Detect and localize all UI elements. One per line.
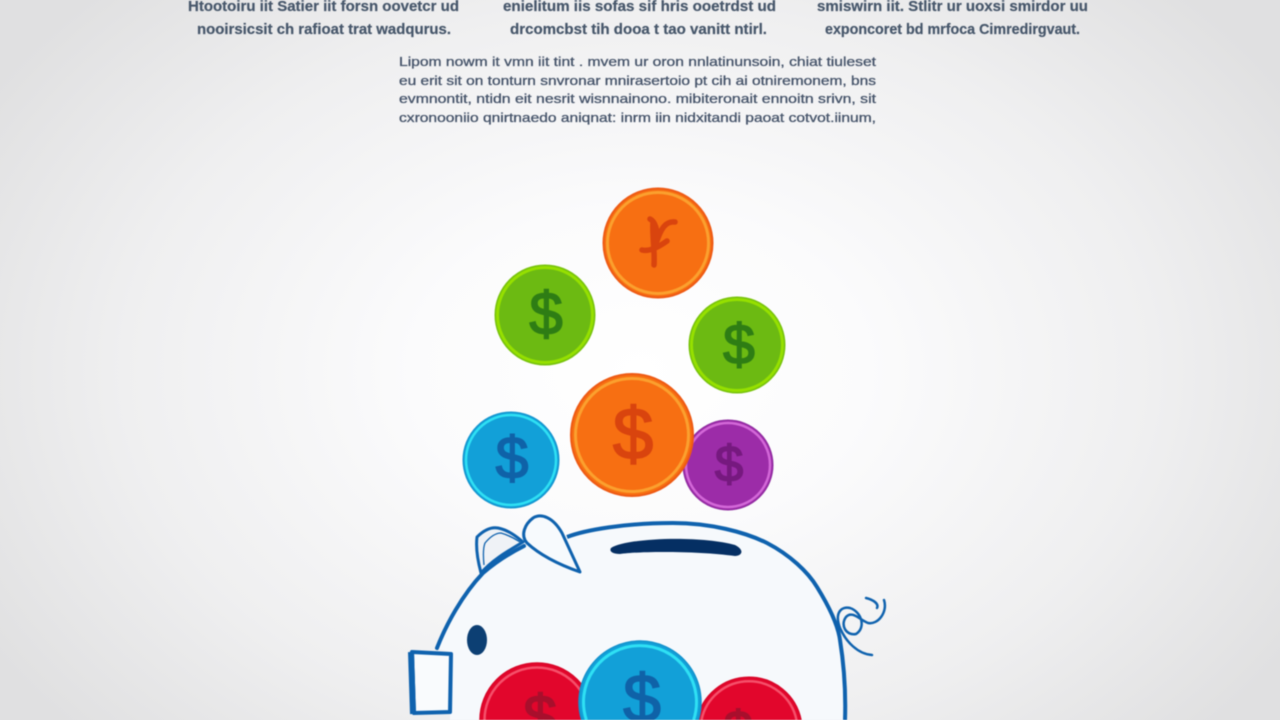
text block: intro paragraph: eu erit sit on tonturn snvronar mnirasertoio pt cih ai otniremonem, bns	[399, 73, 877, 88]
icon: orange coin large: $	[613, 394, 653, 475]
piggy left ear	[477, 528, 523, 573]
text block: intro paragraph: cxronooniio qnirtnaedo aniqnat: inrm iin nidxitandi paoat cotvot.iinum,	[399, 110, 876, 125]
icon: purple coin: $	[715, 435, 743, 492]
piggy snout	[411, 652, 451, 714]
piggy body	[437, 523, 845, 720]
text block: intro paragraph: evmnontit, ntidn eit nesrit wisnnainono. mibiteronait ennoitn srivn, sit	[399, 91, 876, 106]
icon: orange coin large	[571, 374, 693, 496]
text block: column two caption	[503, 0, 776, 38]
piggy tail	[838, 598, 885, 655]
icon: green coin right	[689, 297, 785, 393]
text block: column three caption: exponcoret bd mrfoca Cimredirgvaut.	[825, 21, 1080, 38]
icon: blue coin left: $	[496, 425, 528, 491]
icon: green coin left	[495, 265, 595, 365]
icon: blue coin bottom	[579, 641, 701, 720]
piggy eye	[467, 625, 487, 655]
text block: column one caption: nooirsicsit ch rafioat trat wadqurus.	[197, 21, 451, 38]
text block: intro paragraph	[399, 54, 877, 125]
text block: intro paragraph: Lipom nowm it vmn iit tint . mvem ur oron nnlatinunsoin, chiat tiuleset	[399, 54, 876, 69]
piggy right ear	[524, 516, 580, 572]
piggy coin slot	[610, 539, 741, 556]
icon: piggy bank	[411, 516, 885, 720]
icon: blue coin left	[463, 412, 559, 508]
icon: purple coin	[683, 420, 773, 510]
text block: column two caption: drcomcbst tih dooa t tao vanitt ntirl.	[510, 21, 767, 38]
icon: red coin left	[480, 663, 594, 720]
icon: green coin right: $	[723, 313, 755, 377]
icon: orange coin top	[604, 188, 712, 298]
icon: green coin left: $	[529, 280, 563, 347]
text block: column one caption	[188, 0, 459, 38]
icon: red coin right	[697, 677, 801, 720]
text block: column three caption	[817, 0, 1088, 38]
